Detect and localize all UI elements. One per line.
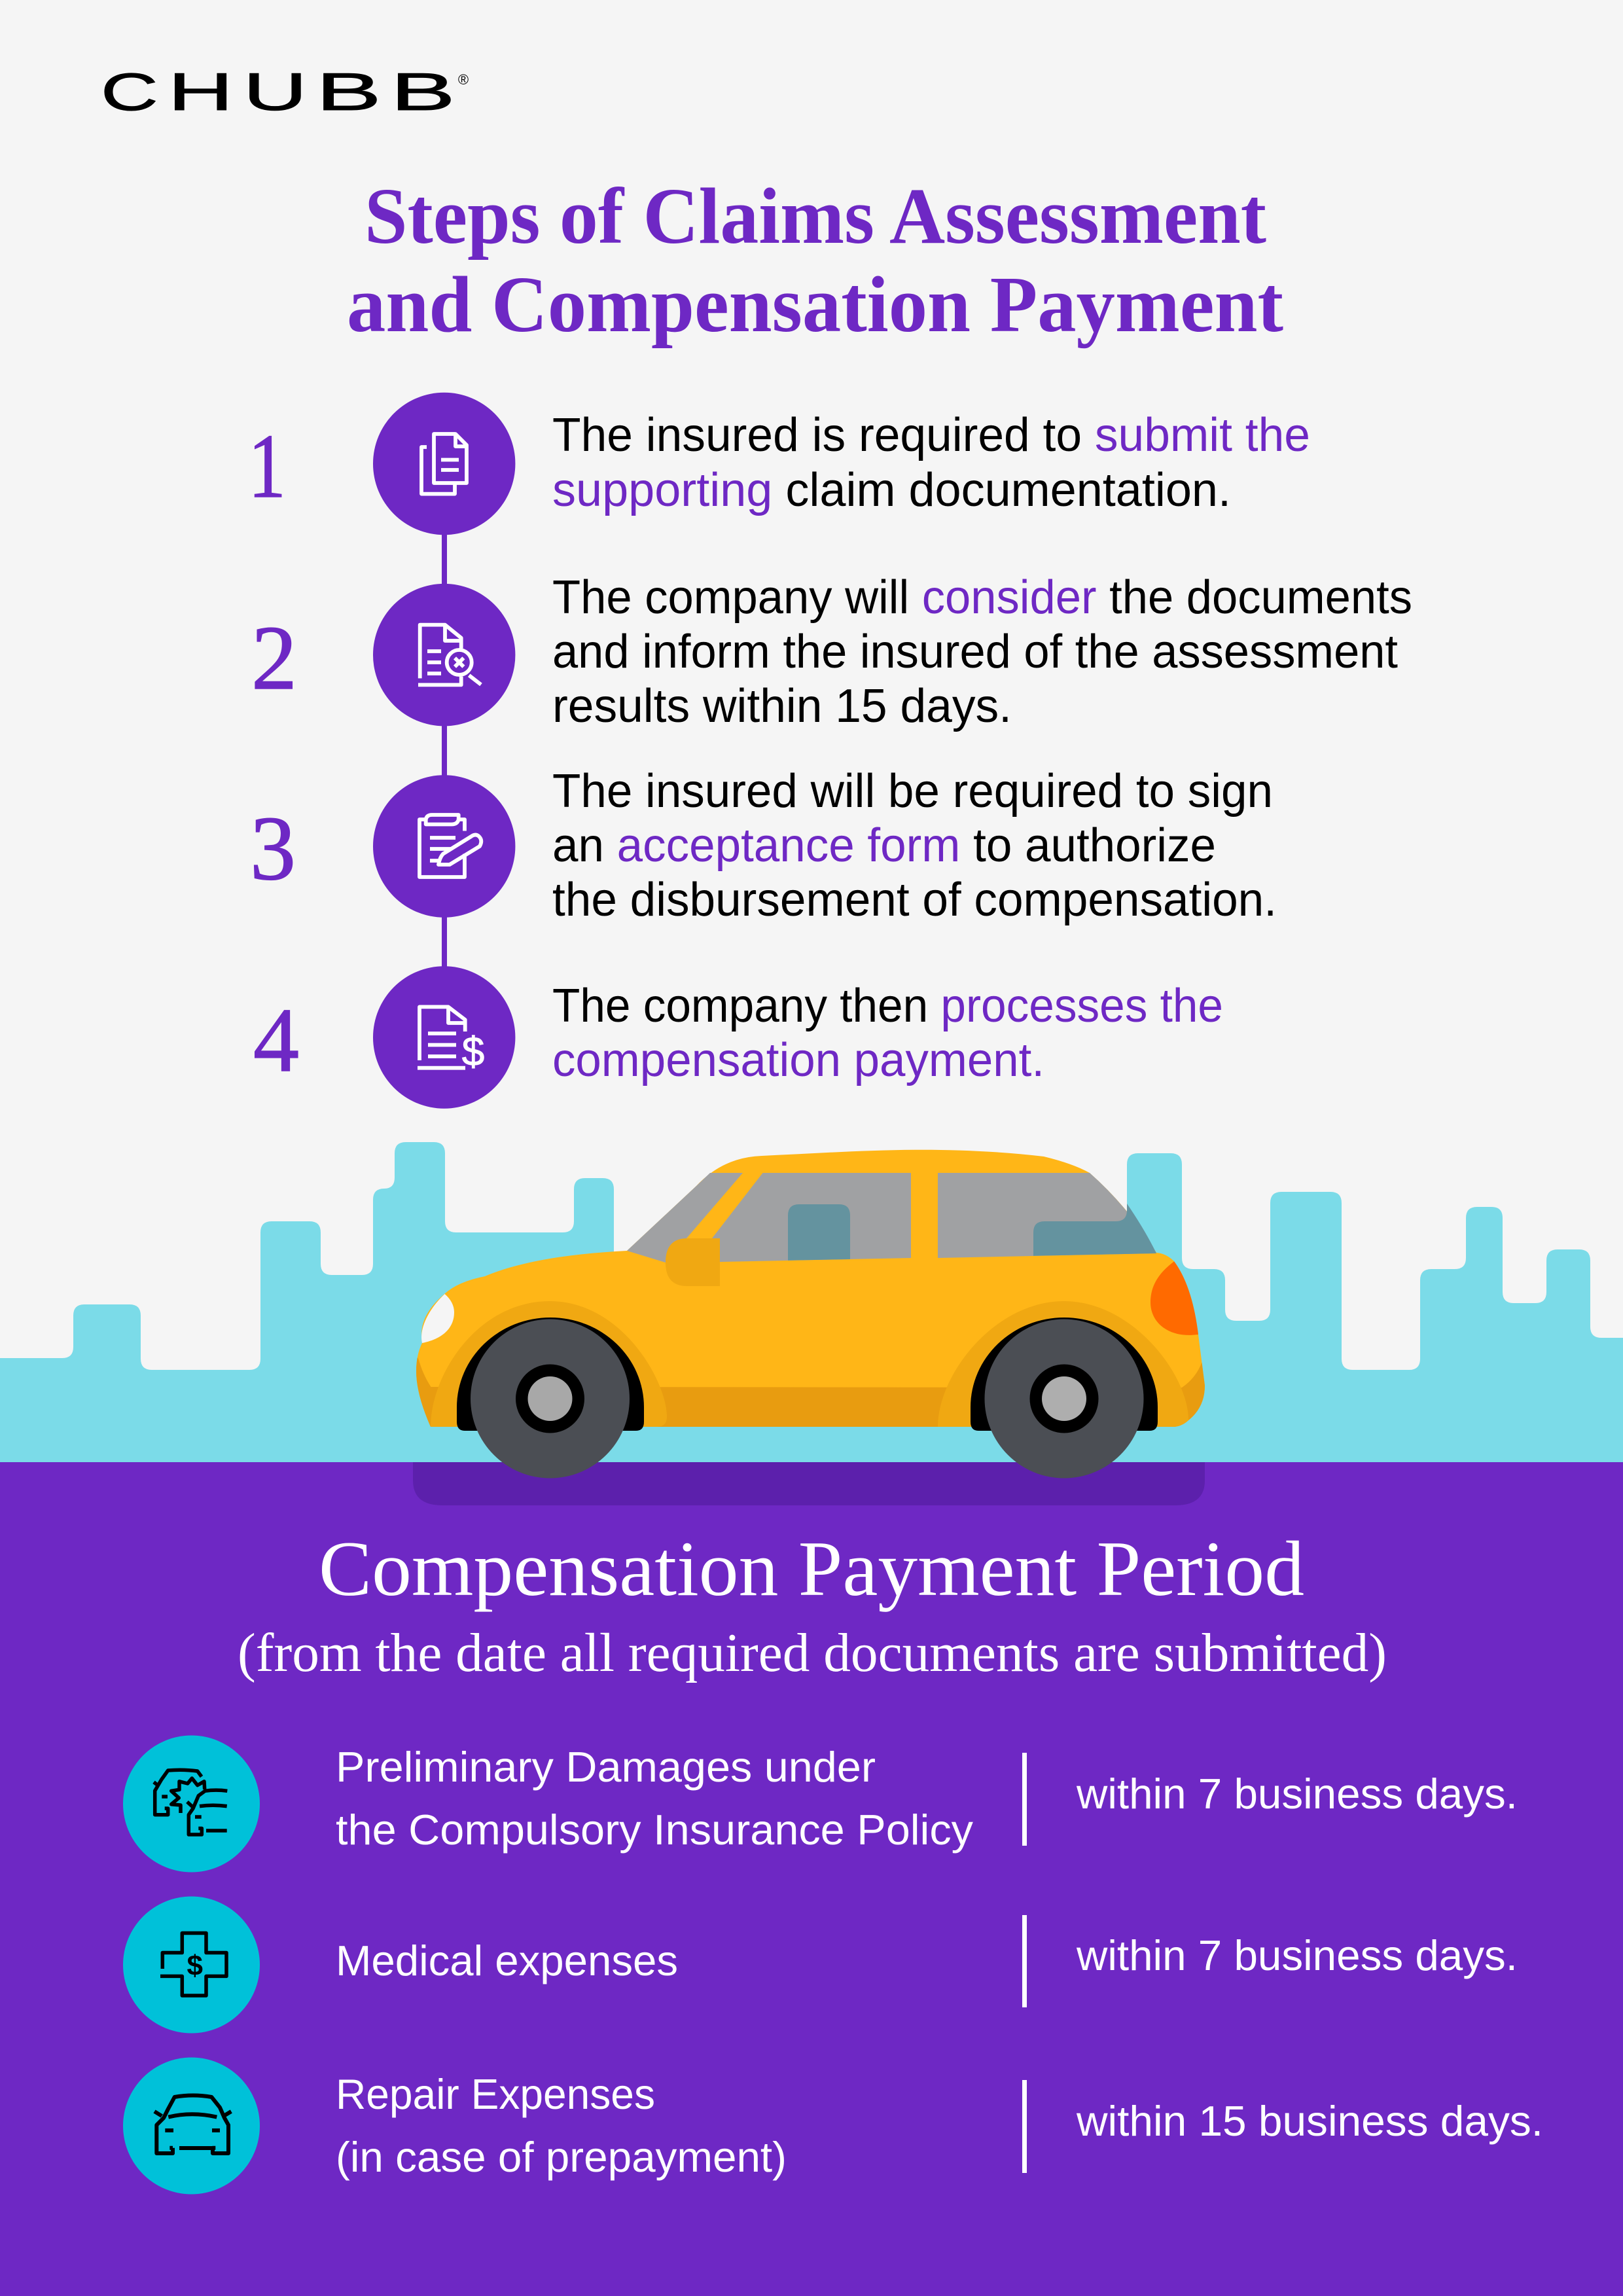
car shadow xyxy=(413,1462,1205,1505)
label: repair expenses xyxy=(336,2070,787,2181)
label: repair expenses: Repair Expenses xyxy=(336,2070,655,2118)
front wheel well xyxy=(457,1318,644,1431)
icon: documents xyxy=(421,434,467,494)
title xyxy=(347,172,1283,349)
building through rear window xyxy=(1033,1204,1156,1256)
divider xyxy=(1022,2080,1027,2173)
connector line between steps xyxy=(442,463,447,1037)
step 4 text: compensation payment. xyxy=(552,1034,1044,1086)
step 3 xyxy=(250,765,1277,926)
row: medical expenses xyxy=(123,1897,1518,2033)
tail light xyxy=(1150,1261,1198,1335)
step 4 xyxy=(253,966,1223,1109)
step 1 number: 1 xyxy=(248,415,286,517)
step 2 text xyxy=(552,571,1412,732)
icon: car front xyxy=(154,2096,231,2153)
divider xyxy=(1022,1753,1027,1846)
step 1 xyxy=(248,393,1310,535)
step 3 number: 3 xyxy=(250,798,296,899)
step 2 text: and inform the insured of the assessment xyxy=(552,626,1398,678)
rear wheel well xyxy=(971,1318,1158,1431)
icon circle: crash xyxy=(123,1736,260,1872)
icon: document review xyxy=(418,625,481,685)
step 2 text: results within 15 days. xyxy=(552,680,1012,732)
headlight xyxy=(421,1294,454,1343)
title: Steps of Claims Assessment xyxy=(365,172,1266,260)
step 1 text xyxy=(552,409,1310,516)
divider xyxy=(1022,1915,1027,2007)
period: 7 business days: within 7 business days. xyxy=(1076,1931,1518,1979)
step 2 circle xyxy=(373,584,515,726)
label: medical expenses: Medical expenses xyxy=(336,1937,678,1984)
section subheading: (from the date all required documents are submitted) xyxy=(238,1623,1387,1683)
row: repair expenses xyxy=(123,2058,1543,2194)
icon circle: car xyxy=(123,2058,260,2194)
period: 15 business days: within 15 business days. xyxy=(1076,2097,1543,2145)
icon: document with dollar xyxy=(418,1007,484,1075)
rear wheel xyxy=(984,1319,1144,1478)
step 3 circle xyxy=(373,775,515,918)
front wheel arch xyxy=(431,1301,667,1427)
side mirror xyxy=(666,1238,720,1286)
logo: Chubb: B xyxy=(316,62,382,121)
period: 7 business days: within 7 business days. xyxy=(1076,1770,1518,1818)
label: preliminary damages: the Compulsory Insurance Policy xyxy=(336,1806,974,1854)
row: preliminary damages xyxy=(123,1736,1518,1872)
logo: Chubb: ® xyxy=(458,71,469,88)
car illustration xyxy=(412,1150,1211,1478)
step 3 text: the disbursement of compensation. xyxy=(552,874,1277,926)
icon: clipboard and pen xyxy=(419,815,481,877)
label: repair expenses: (in case of prepayment) xyxy=(336,2133,787,2181)
car body xyxy=(416,1150,1205,1427)
logo: Chubb: B xyxy=(391,62,455,122)
icon: car crash xyxy=(154,1770,227,1835)
step 1 text: The insured is required to submit the xyxy=(552,409,1310,461)
step 4 circle xyxy=(373,966,515,1109)
title: and Compensation Payment xyxy=(347,260,1283,349)
logo: Chubb: U xyxy=(243,62,307,121)
step 1 circle xyxy=(373,393,515,535)
step 3 text: The insured will be required to sign xyxy=(552,765,1273,817)
logo: Chubb: H xyxy=(168,62,234,122)
windshield xyxy=(627,1173,743,1263)
step 3 text: an acceptance form to authorize xyxy=(552,819,1216,872)
label: preliminary damages: Preliminary Damages under xyxy=(336,1743,876,1791)
step 2 number: 2 xyxy=(251,607,297,709)
icon: medical cross with dollar: $ xyxy=(187,1950,203,1982)
front side window xyxy=(712,1173,911,1262)
city skyline xyxy=(0,1142,1623,1462)
icon: medical cross with dollar xyxy=(160,1933,226,1996)
logo: Chubb xyxy=(101,62,469,122)
step 2 xyxy=(251,571,1412,732)
rear wheel arch xyxy=(938,1301,1188,1427)
front wheel xyxy=(471,1319,630,1478)
rear side window xyxy=(938,1173,1156,1258)
purple panel xyxy=(0,1462,1623,2296)
building through front window xyxy=(788,1204,850,1261)
step 3 text xyxy=(552,765,1277,926)
step 4 text xyxy=(552,980,1223,1086)
step 4 number: 4 xyxy=(253,990,299,1091)
step 2 text: The company will consider the documents xyxy=(552,571,1412,624)
step 4 text: The company then processes the xyxy=(552,980,1223,1032)
icon circle: medical xyxy=(123,1897,260,2033)
icon: document with dollar: $ xyxy=(462,1030,484,1075)
section heading: Compensation Payment Period xyxy=(319,1525,1304,1612)
car lower panel xyxy=(416,1357,1205,1427)
logo: Chubb: C xyxy=(101,62,158,121)
label: preliminary damages xyxy=(336,1743,974,1854)
step 1 text: supporting claim documentation. xyxy=(552,464,1231,516)
